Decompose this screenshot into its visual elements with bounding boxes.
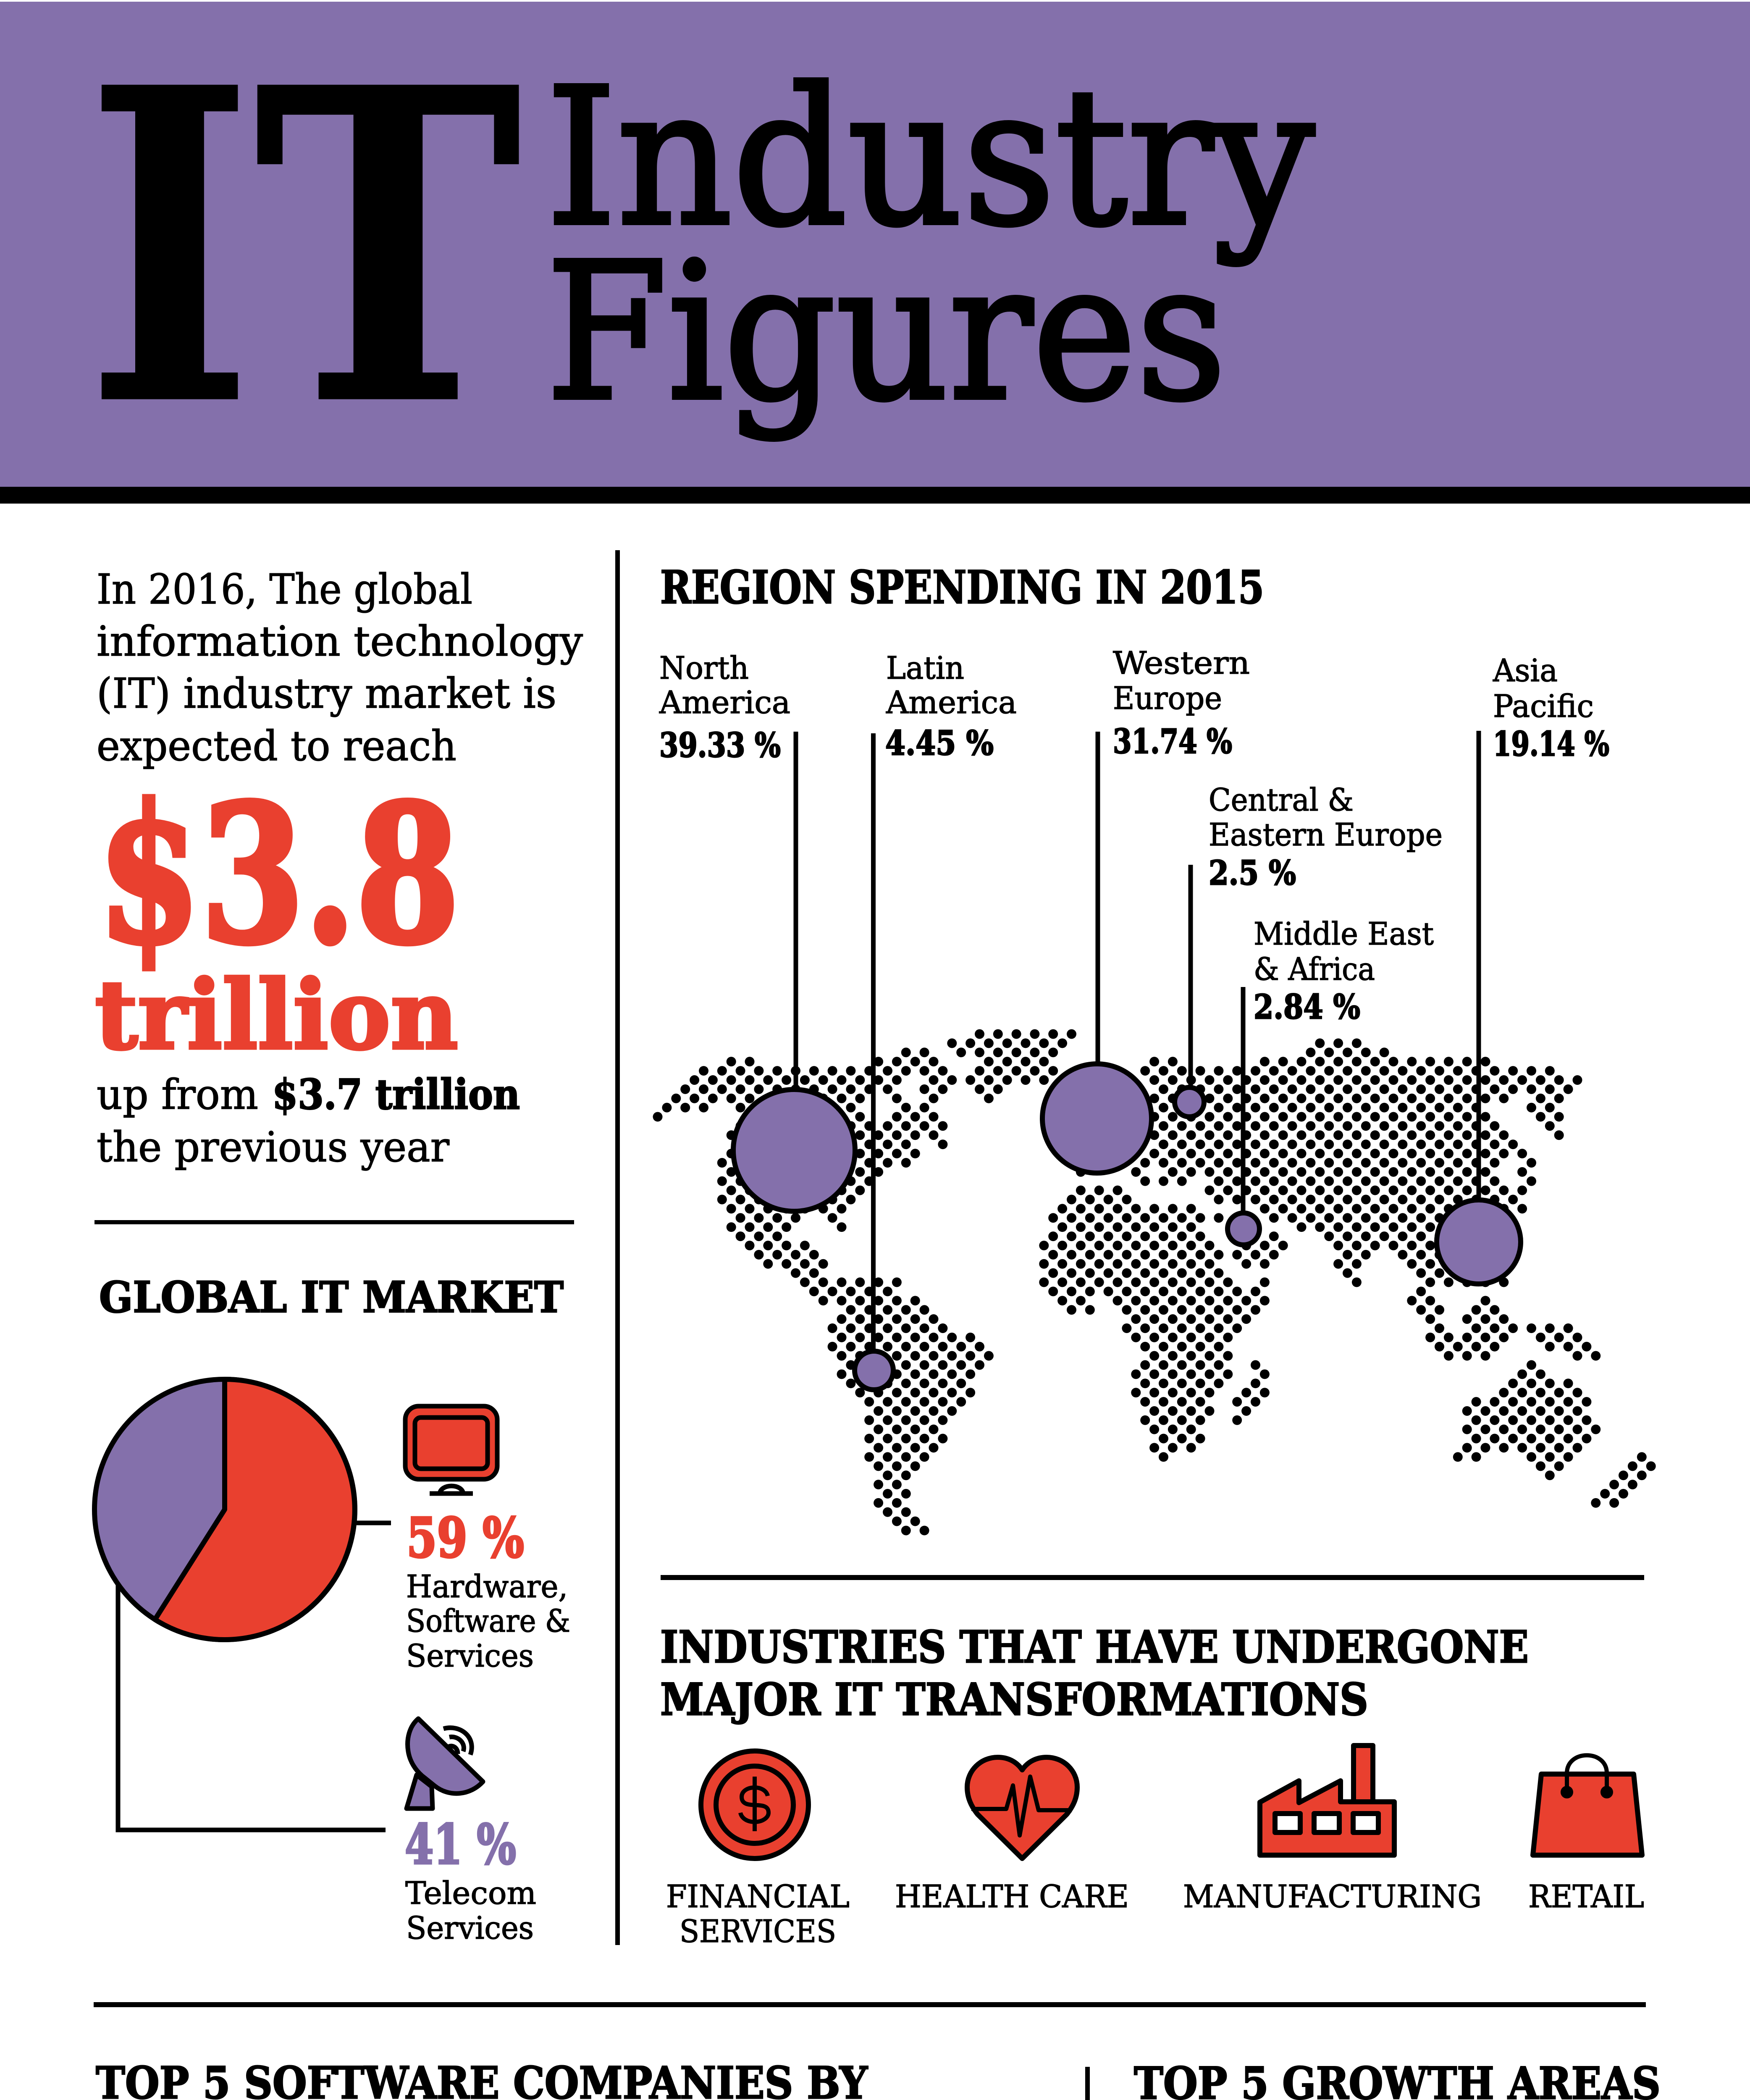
label: health care: HEALTH CARE [895,1879,1129,1915]
label: western europe [1113,645,1250,761]
label: latin america: 4.45 % [885,723,994,763]
heading: MAJOR IT TRANSFORMATIONS [660,1673,1368,1725]
leader lines [796,731,1479,1352]
label: central and eastern europe: Eastern Europe [1209,817,1443,853]
intro text [97,566,583,770]
label: middle east and africa: Middle East [1254,916,1434,952]
panel: global IT market [94,1272,570,1946]
value: 59 %: 59 % [407,1506,524,1570]
label: western europe: Europe [1113,680,1222,717]
icon: health heart [967,1757,1077,1858]
connector: hardware [357,1520,391,1525]
label: latin america: Latin [886,650,964,686]
icon: financial services coin [701,1751,808,1858]
label: latin america: America [886,685,1017,721]
intro text: information technology [97,618,583,666]
heading: INDUSTRIES THAT HAVE UNDERGONE [660,1621,1529,1673]
label: central and eastern europe [1209,782,1443,892]
label: hardware [406,1569,570,1674]
heading [660,1621,1529,1725]
label: financial services: SERVICES [680,1914,836,1950]
panel: region spending [658,561,1652,1530]
label: hardware: Software & [406,1603,570,1639]
label: manufacturing: MANUFACTURING [1183,1879,1482,1915]
comparison text: $3.7 trillion [272,1071,520,1119]
big word: trillion: trillion [95,960,458,1071]
label: asia pacific: Asia [1493,653,1558,689]
label: hardware: Hardware, [406,1569,568,1605]
icon: satellite dish [407,1719,483,1809]
value: 41 %: 41 % [405,1812,516,1877]
title: Industry: Industry [546,48,1314,268]
bubble: latin america [855,1351,893,1390]
label: western europe: Western [1113,645,1250,681]
label: asia pacific: Pacific [1493,688,1594,724]
connector: telecom [118,1581,386,1830]
label: middle east and africa: 2.84 % [1254,987,1360,1026]
heading: GLOBAL IT MARKET [99,1272,564,1322]
label: hardware: Services [406,1638,534,1674]
bubble: middle east and africa [1228,1213,1259,1245]
label: western europe: 31.74 % [1113,722,1232,761]
label: latin america [885,650,1017,763]
label: retail: RETAIL [1528,1879,1644,1915]
intro text: expected to reach [97,722,457,770]
label: north america [659,650,790,765]
title: IT: IT [85,0,522,500]
label: telecom: Telecom [405,1875,536,1911]
label: north america: North [659,650,749,686]
intro text: (IT) industry market is [97,670,556,718]
label: central and eastern europe: Central & [1209,782,1354,818]
bubble: central and eastern europe [1175,1087,1204,1117]
bubble: western europe [1042,1064,1152,1173]
label: middle east and africa [1254,916,1434,1026]
label: asia pacific [1493,653,1609,764]
label: north america: 39.33 % [659,725,781,765]
label: central and eastern europe: 2.5 % [1209,853,1296,892]
label: middle east and africa: & Africa [1254,951,1375,987]
bubble: asia pacific [1437,1200,1521,1284]
label: asia pacific: 19.14 % [1493,724,1609,764]
label: financial services [666,1879,850,1950]
header banner [0,0,1750,504]
pie chart [94,1379,355,1640]
dotted world map [658,1034,1652,1530]
label: north america: America [659,685,790,721]
label: telecom [405,1875,536,1946]
icon: factory [1260,1746,1394,1855]
icon: retail bag [1533,1755,1642,1855]
left column divider [615,550,620,1945]
comparison text: up from [97,1071,258,1119]
big number: $3.8: $3.8 [97,764,459,986]
title: Figures: Figures [546,223,1226,443]
intro panel [95,566,583,1171]
label: financial services: FINANCIAL [666,1879,850,1915]
bubble: north america [733,1089,855,1211]
comparison text: the previous year [97,1124,449,1171]
label: telecom: Services [406,1910,534,1946]
comparison text [97,1071,520,1171]
intro text: In 2016, The global [97,566,472,614]
icon: monitor [405,1406,497,1494]
heading: REGION SPENDING IN 2015 [660,561,1264,614]
panel: industries [660,1621,1644,1950]
